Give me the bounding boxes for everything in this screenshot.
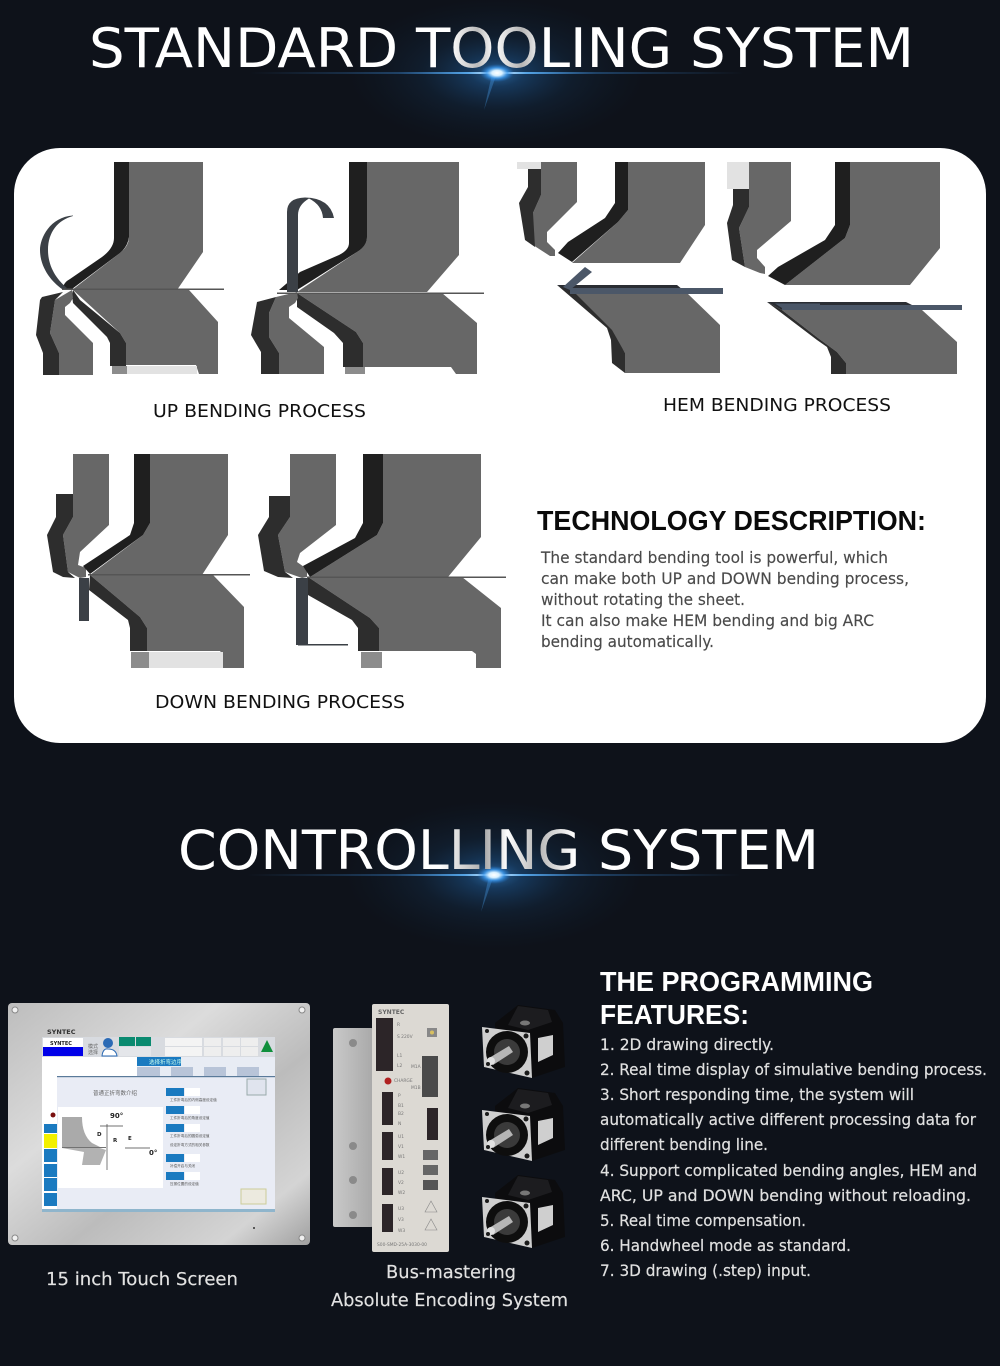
screen: 模式 <box>88 1043 98 1050</box>
caption: down bending process: DOWN BENDING PROCESS <box>155 692 405 713</box>
brand logo: SYNTEC <box>47 1028 76 1036</box>
screen: R <box>113 1138 118 1144</box>
heading: controlling system: CONTROLLING SYSTEM <box>178 819 819 882</box>
servo driver photo: SYNTEC <box>378 1009 405 1016</box>
servo driver photo: R <box>397 1022 400 1028</box>
metal bezel <box>8 1003 310 1245</box>
text block: programming features list: 1. 2D drawing directly. <box>600 1035 774 1054</box>
caption: bus-mastering absolute encoding system: Absolute Encoding System <box>331 1290 568 1311</box>
screen: 工件折弯后的角度设定值 <box>170 1115 210 1120</box>
servo driver photo: S 220V <box>397 1034 413 1040</box>
text block: technology description: It can also make HEM bending and big ARC <box>541 611 874 630</box>
servo driver photo <box>333 1004 449 1252</box>
screen: 普通正折弯数介绍 <box>93 1089 138 1097</box>
text block: programming features list: 6. Handwheel mode as standard. <box>600 1236 851 1255</box>
diagram: hem bending, open <box>517 162 723 373</box>
caption: touch screen: 15 inch Touch Screen <box>46 1269 238 1290</box>
screen: 设定折弯方式的相关参数 <box>170 1142 210 1147</box>
servo driver photo: U2 <box>398 1170 404 1176</box>
diagram: hem bending, closed <box>727 162 962 374</box>
screen: 0° <box>149 1149 157 1157</box>
diagram: up bending, vertical <box>251 162 484 374</box>
heading: the programming features: THE PROGRAMMING <box>600 966 873 997</box>
servo driver photo: S00-SMD-25A-3030-00 <box>377 1242 427 1248</box>
text block: programming features list: different bending line. <box>600 1135 768 1154</box>
servo driver photo: V1 <box>398 1144 404 1150</box>
text block: technology description: without rotating the sheet. <box>541 590 745 609</box>
text block: programming features list: automatically active different processing data for <box>600 1110 976 1129</box>
caption: bus-mastering absolute encoding system: Bus-mastering <box>386 1262 516 1283</box>
screen: 工件折弯后的圆弧设定值 <box>170 1133 210 1138</box>
heading: technology description: TECHNOLOGY DESCRIPTION: <box>537 505 926 536</box>
servo driver photo: W1 <box>398 1154 405 1160</box>
servo driver photo: L1 <box>397 1053 402 1059</box>
text block: technology description: The standard bending tool is powerful, which <box>540 548 888 567</box>
servo driver photo: V3 <box>398 1217 404 1223</box>
servo driver photo: B1 <box>398 1103 404 1109</box>
diagram: down bending, long flange <box>258 454 506 668</box>
servo driver photo: W2 <box>398 1190 405 1196</box>
heading: the programming features: FEATURES: <box>600 999 749 1030</box>
screen <box>42 1037 275 1212</box>
caption: bus-mastering absolute encoding system <box>331 1262 568 1311</box>
servo driver photo: U1 <box>398 1134 404 1140</box>
diagram: up bending, arc <box>36 162 224 375</box>
text block: programming features list: ARC, UP and DOWN bending without reloading. <box>600 1186 971 1205</box>
servo motor 1 <box>482 1005 565 1078</box>
screen: 选择 <box>88 1049 98 1056</box>
caption: up bending process: UP BENDING PROCESS <box>153 401 366 422</box>
servo driver photo: W3 <box>398 1228 405 1234</box>
screen: D <box>97 1132 102 1138</box>
text block: programming features list: 7. 3D drawing (.step) input. <box>600 1261 811 1280</box>
servo driver photo: P <box>398 1093 401 1099</box>
text block: technology description <box>540 548 909 651</box>
servo driver photo: N <box>398 1121 401 1127</box>
servo driver photo: V2 <box>398 1180 404 1186</box>
servo driver photo: M1A <box>411 1064 421 1070</box>
heading: standard tooling system: STANDARD TOOLING SYSTEM <box>89 17 914 80</box>
servo driver photo: L2 <box>397 1063 402 1069</box>
text block: technology description: bending automatically. <box>541 632 714 651</box>
caption: hem bending process: HEM BENDING PROCESS <box>663 395 891 416</box>
panel: touch screen photo <box>8 1003 310 1245</box>
servo driver photo: U3 <box>398 1206 404 1212</box>
servo driver photo: M1B <box>411 1085 421 1091</box>
servo driver photo: B2 <box>398 1111 404 1117</box>
text block: programming features list: 4. Support complicated bending angles, HEM and <box>600 1161 977 1180</box>
screen: 90° <box>110 1112 123 1120</box>
title glow: standard tooling <box>250 0 744 148</box>
screen: 压紧位置的设定值 <box>170 1181 199 1186</box>
screen: 选择折弯边序 <box>149 1058 183 1066</box>
screen: SYNTEC <box>50 1041 72 1047</box>
screen: 补偿开启与关闭 <box>170 1163 196 1168</box>
text block: programming features list <box>600 1035 987 1280</box>
text block: programming features list: 5. Real time compensation. <box>600 1211 806 1230</box>
servo driver photo: CHARGE <box>394 1078 413 1084</box>
text block: programming features list: 2. Real time display of simulative bending process. <box>600 1060 987 1079</box>
diagram: down bending, short flange <box>47 454 250 668</box>
screen: 工件折弯后的内侧高度设定值 <box>170 1097 217 1102</box>
title glow: controlling <box>247 800 741 950</box>
servo motor 3 <box>482 1175 565 1248</box>
screen: E <box>128 1136 132 1142</box>
text block: technology description: can make both UP and DOWN bending process, <box>541 569 909 588</box>
panel: standard tooling <box>14 148 986 743</box>
panel background <box>14 148 986 743</box>
servo motor 2 <box>482 1088 565 1161</box>
heading: the programming features <box>600 966 873 1030</box>
text block: programming features list: 3. Short responding time, the system will <box>600 1085 914 1104</box>
